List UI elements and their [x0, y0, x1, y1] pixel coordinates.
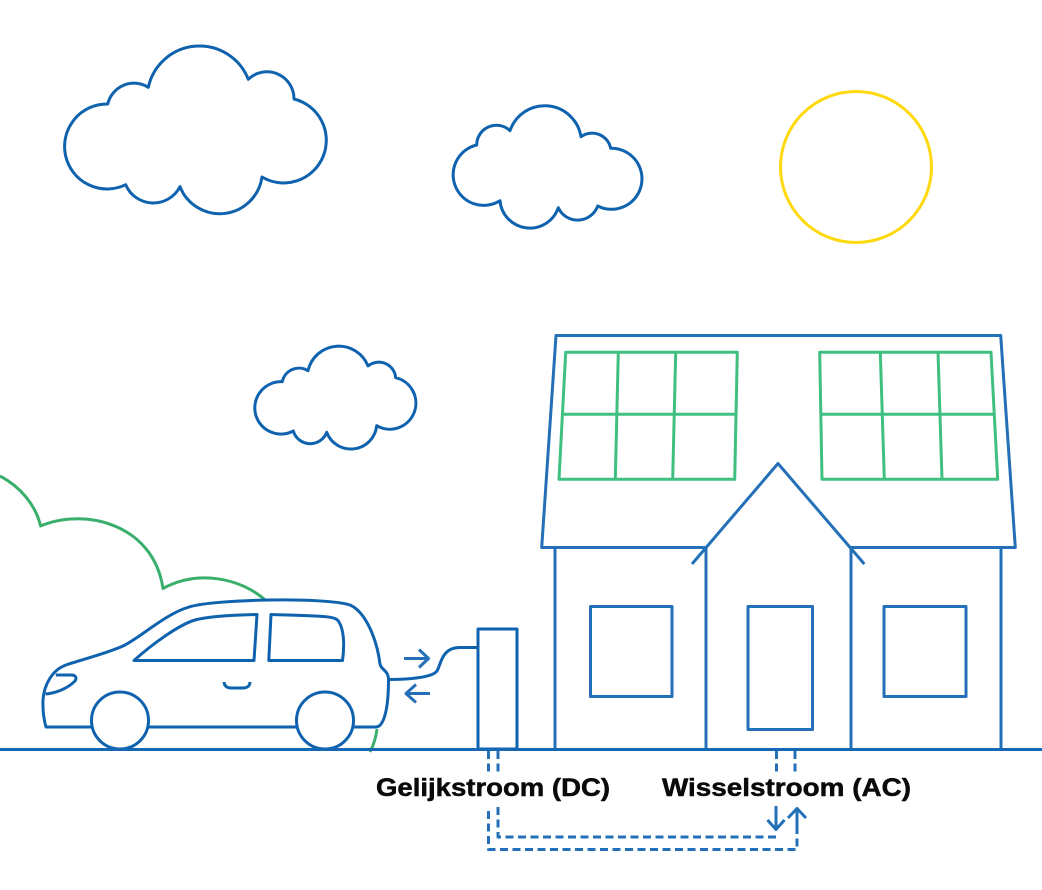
gable: [692, 464, 864, 564]
arrow: to car: [406, 684, 430, 702]
car rear window: [269, 614, 344, 660]
walls: [555, 548, 1001, 749]
label: direct current: Gelijkstroom (DC): [376, 774, 610, 802]
door: [748, 606, 812, 730]
charging cable: [389, 648, 478, 680]
right window: [884, 606, 966, 696]
DC wiring: [488, 751, 797, 850]
AC wiring: [776, 751, 795, 775]
arrow: to station: [404, 650, 428, 668]
house: [542, 336, 1015, 749]
icon: small cloud: [255, 346, 416, 449]
solar panels: right: [820, 352, 998, 479]
front wheel: [92, 692, 148, 749]
car: [43, 600, 389, 749]
solar panels: left: [559, 352, 737, 479]
roof: [542, 336, 1015, 548]
bushes behind the car: [0, 476, 377, 752]
charging station: [478, 629, 517, 749]
icon: large cloud: [65, 46, 326, 214]
headlight: [46, 675, 76, 694]
door handle: [224, 682, 250, 688]
arrow: AC down: [768, 806, 784, 830]
arrow: AC up: [788, 808, 806, 833]
rear wheel: [296, 692, 354, 749]
label: alternating current: Wisselstroom (AC): [662, 774, 911, 802]
ground line: [0, 748, 1042, 751]
car body: [43, 600, 389, 727]
icon: sun: [780, 92, 932, 242]
icon: medium cloud: [453, 106, 642, 228]
left window: [590, 606, 672, 696]
car front window: [134, 614, 257, 660]
